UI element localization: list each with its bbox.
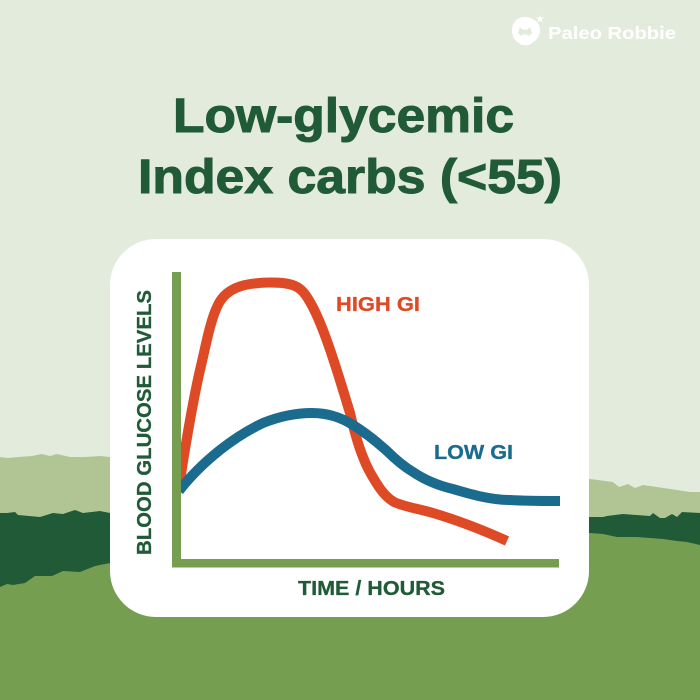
logo wordmark: Paleo Robbie	[548, 23, 676, 43]
title	[138, 90, 562, 204]
background: foreground green hill	[0, 533, 700, 700]
chart: blood glucose curves	[172, 272, 560, 568]
curve: low GI	[179, 413, 560, 501]
label: high GI: HIGH GI	[336, 293, 420, 316]
x axis	[172, 559, 559, 568]
title: Index carbs (<55)	[138, 151, 562, 204]
logo: Paleo Robbie	[512, 15, 676, 45]
panel: chart card	[110, 239, 589, 617]
title: Low-glycemic	[173, 90, 514, 143]
background: dark hill layer	[0, 510, 700, 600]
y axis	[172, 272, 181, 567]
background: light hill layer	[0, 454, 700, 600]
icon: logo mark	[512, 15, 544, 45]
label: low GI: LOW GI	[434, 441, 513, 464]
y axis label: BLOOD GLUCOSE LEVELS	[133, 290, 156, 555]
curve: high GI	[179, 282, 507, 541]
x axis label: TIME / HOURS	[298, 577, 445, 600]
